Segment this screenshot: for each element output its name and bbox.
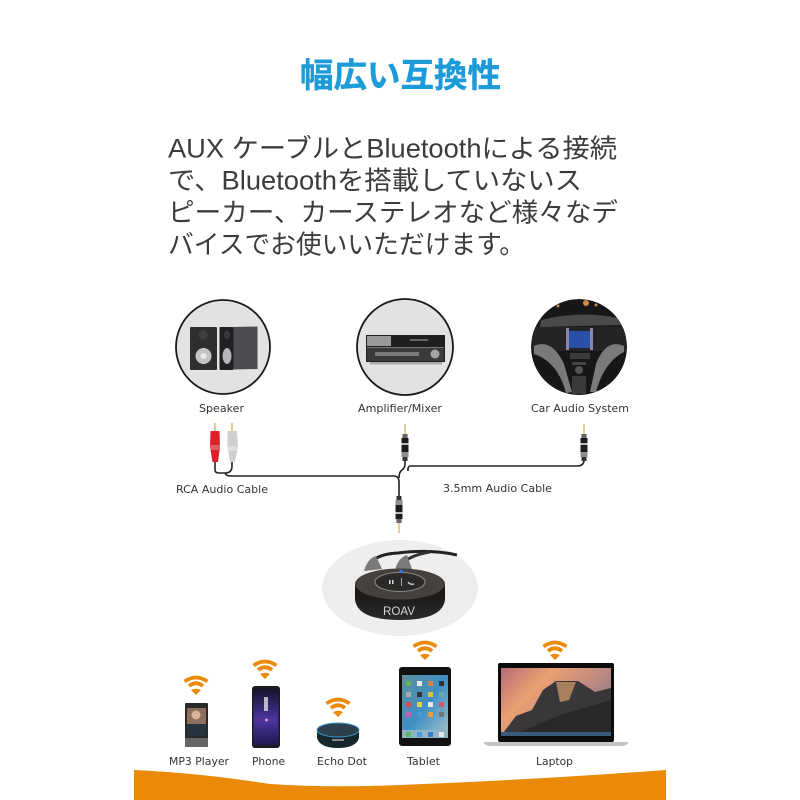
label: RCA cable: RCA Audio Cable <box>176 483 268 496</box>
device: laptop <box>484 663 628 746</box>
device: ROAV receiver: ROAV <box>383 606 415 618</box>
icon: speaker circle <box>176 300 270 394</box>
body text <box>168 134 618 260</box>
label: 3.5mm cable: 3.5mm Audio Cable <box>443 482 552 495</box>
label: amplifier: Amplifier/Mixer <box>358 402 442 415</box>
RCA cable <box>210 423 399 500</box>
label: echo dot: Echo Dot <box>317 755 368 768</box>
device: phone <box>252 686 280 748</box>
label: phone: Phone <box>252 755 285 768</box>
icon: wifi echo <box>326 700 350 717</box>
device: MP3 player <box>185 703 208 747</box>
input jack <box>396 496 402 533</box>
icon: wifi tablet <box>414 642 436 660</box>
icon: car audio circle <box>531 299 627 395</box>
device: Echo Dot <box>317 723 359 748</box>
body text: AUX ケーブルとBluetoothによる接続 <box>168 134 617 164</box>
orange wave footer <box>134 770 666 800</box>
3.5mm cable <box>399 424 588 478</box>
device: tablet <box>399 667 451 746</box>
device: ROAV receiver <box>322 540 478 636</box>
title: 幅広い互換性 <box>300 58 501 95</box>
label: MP3 player: MP3 Player <box>169 755 229 768</box>
body text: バイスでお使いいただけます。 <box>168 230 525 260</box>
label: car audio: Car Audio System <box>531 402 629 415</box>
body text: で、Bluetoothを搭載していないス <box>168 166 582 196</box>
icon: wifi MP3 <box>184 678 208 695</box>
label: tablet: Tablet <box>406 755 441 768</box>
icon: amplifier circle <box>357 299 453 395</box>
icon: wifi laptop <box>544 642 566 660</box>
label: laptop: Laptop <box>536 755 573 768</box>
body text: ピーカー、カーステレオなど様々なデ <box>168 198 618 228</box>
icon: wifi phone <box>254 662 276 679</box>
label: speaker: Speaker <box>199 402 244 415</box>
